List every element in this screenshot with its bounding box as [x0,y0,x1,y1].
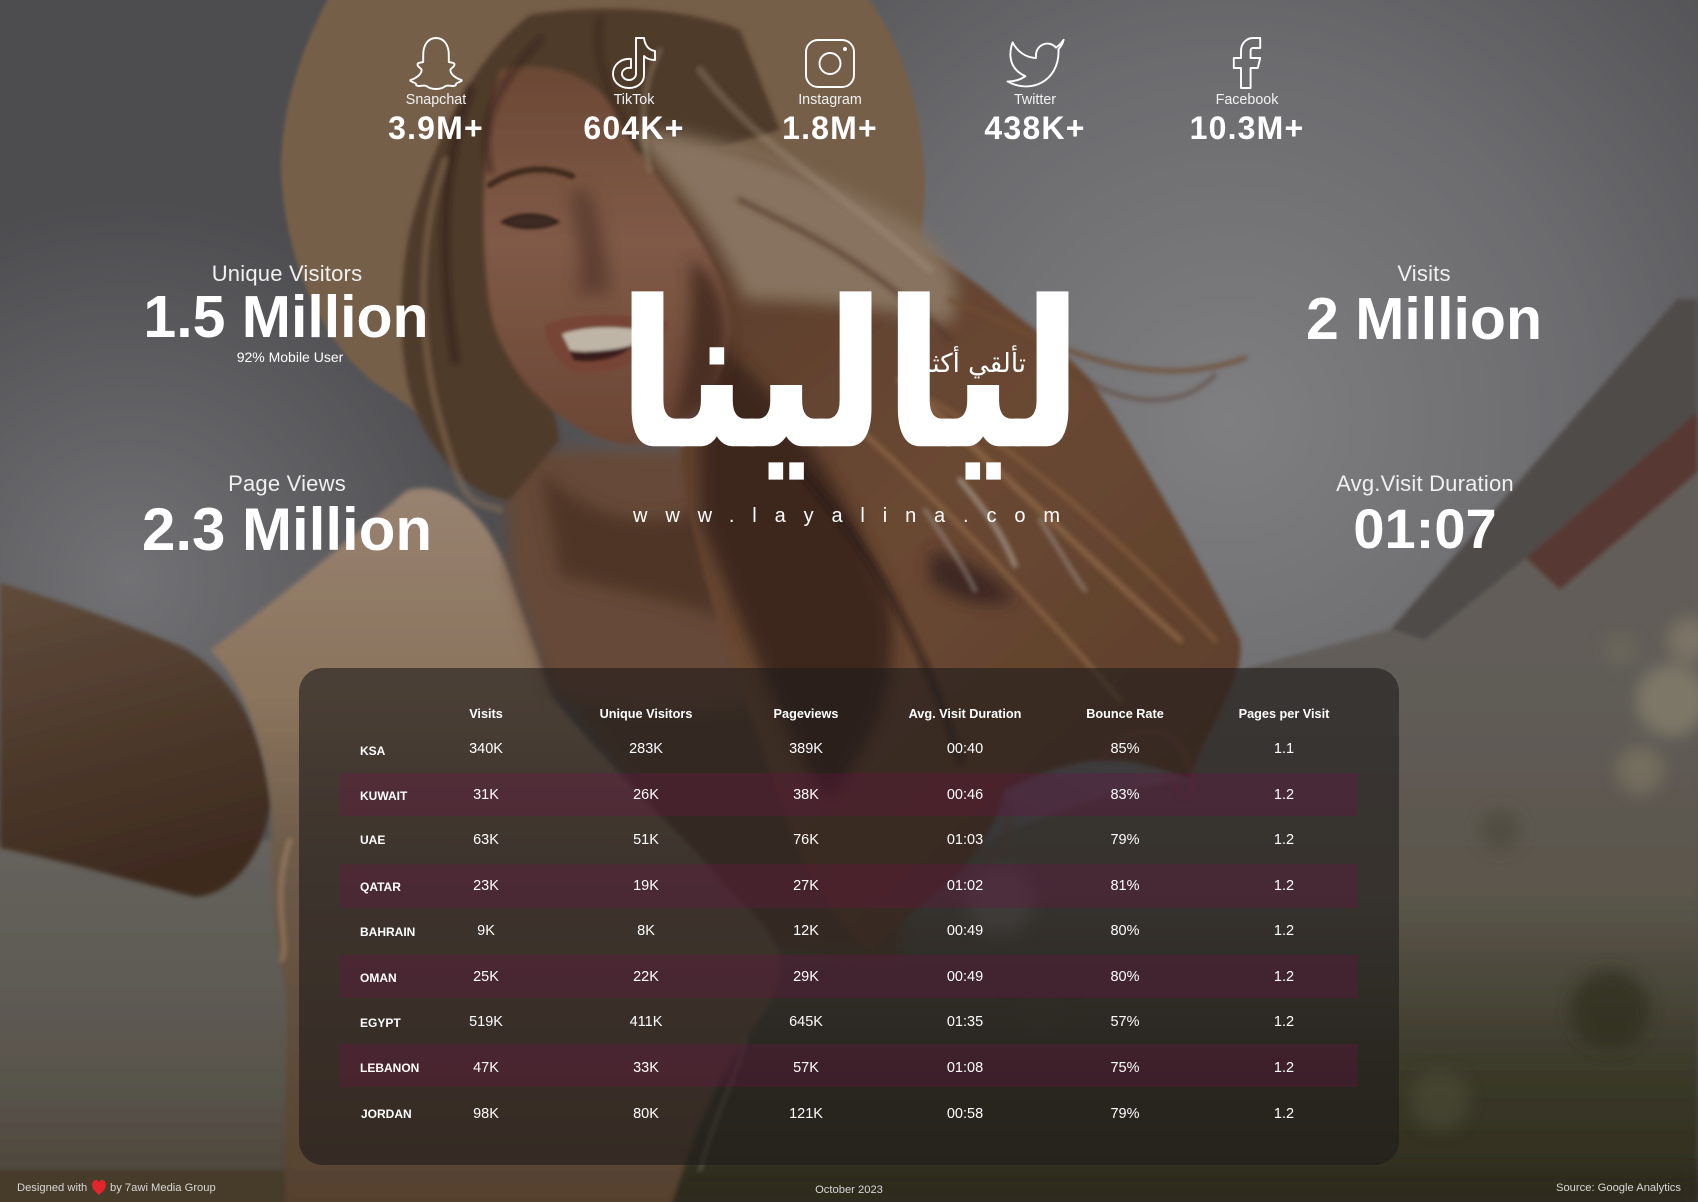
table row stripes [340,773,1358,1087]
table header: Pageviews [774,707,838,721]
background photo: woman [0,9,1241,1202]
row: UAE: 01:03 [947,832,983,848]
row: Lebanon: 1.2 [1274,1060,1294,1076]
row: Egypt: EGYPT [360,1016,401,1030]
row: Egypt: 645K [789,1014,823,1030]
social: TikTok: TikTok [614,92,655,108]
row: KSA: 00:40 [947,741,983,757]
row: Jordan: 98K [473,1106,499,1122]
background photo: house and garden [640,299,1698,1202]
table header: Pages per Visit [1239,707,1330,721]
row: Kuwait: 1.2 [1274,787,1294,803]
row: Kuwait: 38K [793,787,819,803]
row: Qatar: 23K [473,878,499,894]
row: Lebanon: LEBANON [360,1061,419,1075]
row: Kuwait: 26K [633,787,659,803]
row: Jordan: 00:58 [947,1106,983,1122]
row: Egypt: 57% [1110,1014,1140,1030]
row: Oman: 29K [793,969,819,985]
icon: heart [92,1180,106,1195]
table header: Visits [469,707,503,721]
stat: page views: Page Views [228,471,346,496]
social: Snapchat [388,38,484,146]
hair shadow beside the neck [700,330,892,800]
row: Oman: 1.2 [1274,969,1294,985]
row: KSA: KSA [360,744,386,758]
row: KSA [360,741,1294,758]
row: KSA: 283K [629,741,663,757]
footer: designer credit: by 7awi Media Group [110,1182,216,1194]
row: Qatar: 01:02 [947,878,983,894]
row: Jordan: 80K [633,1106,659,1122]
row: Bahrain [360,923,1294,939]
stat: unique visitors: 92% Mobile User [237,349,344,365]
row: Oman: 22K [633,969,659,985]
social: Twitter: 438K+ [984,110,1086,146]
hair mass, right [640,148,1241,950]
logo: Layalina: ليالينا [618,258,1082,492]
face shadow [670,260,726,430]
social: Snapchat: Snapchat [406,92,466,108]
dark backing between chest and hair [540,660,900,960]
row: Jordan: 1.2 [1274,1106,1294,1122]
social: Snapchat: 3.9M+ [388,110,484,146]
row: Lebanon: 01:08 [947,1060,983,1076]
row: KSA: 1.1 [1274,741,1294,757]
row: Bahrain: 80% [1110,923,1140,939]
icon: Snapchat ghost [410,38,462,89]
social: Facebook: Facebook [1216,92,1279,108]
stat: average visit duration: 01:07 [1353,497,1497,560]
social: TikTok [583,38,685,146]
row: Bahrain: 12K [793,923,819,939]
stat: average visit duration: Avg.Visit Duration [1336,471,1514,496]
row: Qatar: 81% [1110,878,1140,894]
table header: Bounce Rate [1086,707,1164,721]
row: UAE: 51K [633,832,659,848]
row: Jordan [361,1106,1294,1122]
row: Jordan: JORDAN [361,1107,412,1121]
row: UAE: 79% [1110,832,1140,848]
row: Egypt [360,1014,1294,1030]
row: UAE [360,832,1294,848]
row: Oman: 00:49 [947,969,983,985]
row: Qatar: 27K [793,878,819,894]
stat: visits: Visits [1397,261,1451,286]
row: Egypt: 01:35 [947,1014,983,1030]
icon: Instagram camera [806,40,854,87]
row: Bahrain: 1.2 [1274,923,1294,939]
row: Bahrain: 8K [637,923,655,939]
row: Oman: OMAN [360,971,397,985]
row: Lebanon: 57K [793,1060,819,1076]
row: Jordan: 79% [1110,1106,1140,1122]
social media stats [388,38,1304,146]
row: Qatar: QATAR [360,880,401,894]
stat: average visit duration [1336,471,1514,560]
row: Bahrain: BAHRAIN [360,925,415,939]
row: UAE: UAE [360,833,385,847]
icon: Twitter bird [1008,40,1064,86]
row: Egypt: 519K [469,1014,503,1030]
table header: Avg. Visit Duration [909,707,1021,721]
row: Kuwait: KUWAIT [360,789,408,803]
row: KSA: 389K [789,741,823,757]
row: Lebanon: 47K [473,1060,499,1076]
social: TikTok: 604K+ [583,110,685,146]
row: Bahrain: 9K [477,923,495,939]
row: Qatar: 1.2 [1274,878,1294,894]
social: Instagram: 1.8M+ [782,110,878,146]
background photo: hat [281,0,925,430]
footer: source: Source: Google Analytics [1556,1182,1681,1194]
background photo: facial features and hair strands [281,20,1245,1170]
footer: designer credit: Designed with [17,1182,87,1194]
stat: unique visitors: 1.5 Million [143,284,429,350]
stat: page views: 2.3 Million [142,496,432,563]
logo tagline: تألقي أكثر [916,344,1026,379]
row: UAE: 76K [793,832,819,848]
stat: unique visitors: Unique Visitors [212,261,362,286]
row: Qatar [360,878,1294,894]
icon: Facebook f [1234,38,1260,88]
row: Lebanon: 75% [1110,1060,1140,1076]
row: Oman: 25K [473,969,499,985]
logo website: www.layalina.com [632,505,1060,527]
face [483,66,730,445]
table header: Unique Visitors [600,707,692,721]
arm [0,583,271,897]
row: Lebanon: 33K [633,1060,659,1076]
footer: designer credit [17,1180,216,1195]
row: Jordan: 121K [789,1106,823,1122]
row: Qatar: 19K [633,878,659,894]
row: Oman [360,969,1294,985]
chest [505,450,760,709]
shirt [210,488,781,1202]
stat: visits: 2 Million [1306,286,1542,352]
icon: TikTok note [613,38,655,88]
background photo: area below the arm [0,840,290,1202]
table background [299,668,1399,1165]
row: UAE: 1.2 [1274,832,1294,848]
blonde sweep across the face and hat [630,130,957,325]
social: Twitter: Twitter [1014,92,1056,108]
social: Instagram: Instagram [798,92,862,108]
row: Kuwait: 31K [473,787,499,803]
social: Instagram [782,40,878,146]
social: Facebook: 10.3M+ [1190,110,1304,146]
row: Egypt: 411K [630,1014,663,1030]
social: Twitter [984,40,1086,146]
row: Oman: 80% [1110,969,1140,985]
row: Lebanon [360,1060,1294,1076]
row: Egypt: 1.2 [1274,1014,1294,1030]
table header [469,707,1330,721]
row: Kuwait [360,787,1294,803]
row: Kuwait: 00:46 [947,787,983,803]
stat: unique visitors [143,261,429,365]
row: Bahrain: 00:49 [947,923,983,939]
panel: country table [299,668,1399,1165]
row: Kuwait: 83% [1110,787,1140,803]
social: Facebook [1190,38,1304,146]
row: UAE: 63K [473,832,499,848]
footer: date: October 2023 [815,1184,883,1196]
row: KSA: 85% [1110,741,1140,757]
row: KSA: 340K [469,741,503,757]
hair mass, left and crown [401,9,780,500]
